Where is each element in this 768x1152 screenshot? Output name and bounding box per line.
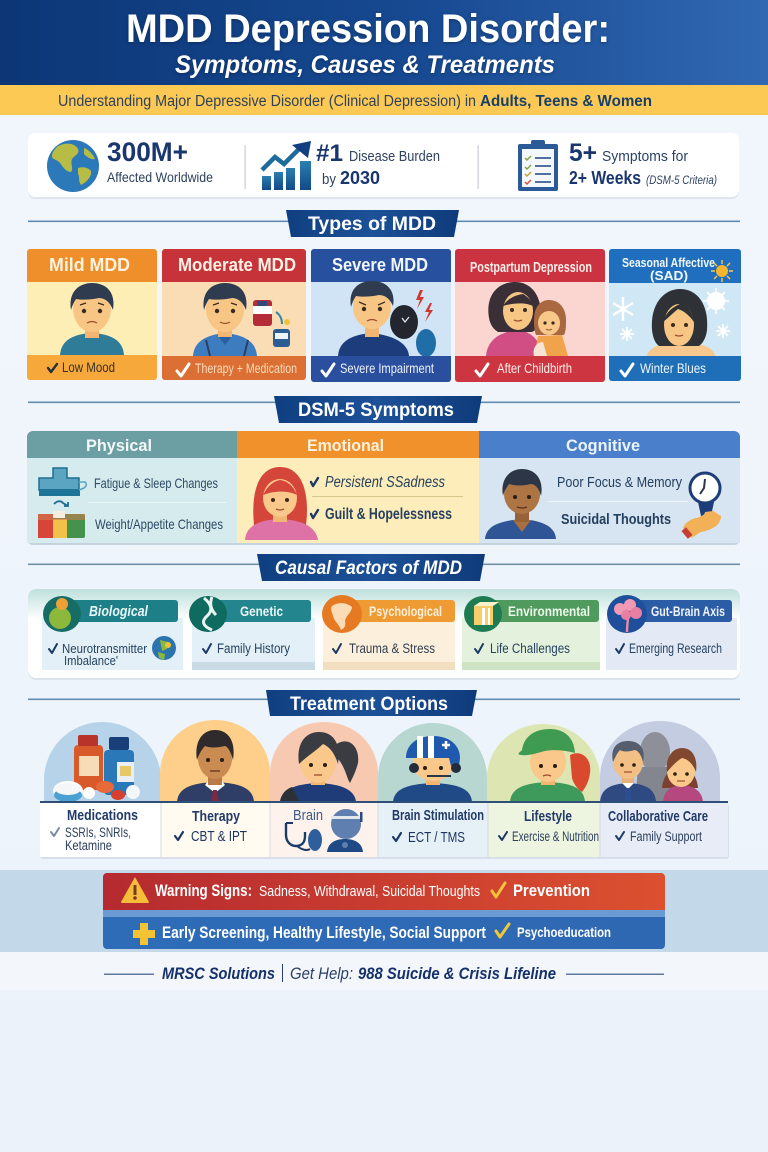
section heading: DSM-5 Symptoms: DSM-5 Symptoms: [298, 400, 454, 421]
icon: medication packs: [253, 300, 290, 347]
panel: Mild MDD: Mild MDD: [49, 255, 130, 275]
panel: Severe MDD: Severe MDD: [332, 255, 428, 275]
factor: Psychological: Psychological: [369, 603, 442, 619]
icon: bed and mug: [39, 468, 86, 506]
icon: plus cross: [133, 923, 155, 945]
section heading: DSM-5 Symptoms: [28, 396, 740, 423]
stat: DSM-5 criteria: 2+ Weeks: [569, 168, 641, 188]
column: Emotional: Persistent SSadness: [325, 474, 445, 491]
warning bar: Prevention: [513, 881, 590, 900]
cell: Brain Stimulation: Brain Stimulation: [392, 808, 484, 824]
panel: Seasonal Affective (SAD): (SAD): [650, 268, 688, 283]
arch: therapy: [160, 720, 270, 802]
cell: Therapy: CBT & IPT: [191, 828, 247, 845]
icon: woman with ponytail: [280, 732, 358, 802]
panel: Postpartum Depression: After Childbirth: [497, 360, 572, 376]
panel: DSM-5 symptoms: [27, 431, 740, 545]
header banner: [0, 0, 768, 85]
cell: Brain Stimulation: ECT / TMS: [408, 829, 465, 846]
icon: pill bottles: [53, 735, 140, 802]
cell: Medications: Ketamine: [65, 838, 112, 853]
factor: Biological: Biological: [89, 603, 149, 620]
section heading: Causal Factors of MDD: Causal Factors of MDD: [275, 558, 462, 579]
panel: Seasonal Affective (SAD): Winter Blues: [640, 360, 706, 376]
cell: Collaborative Care: Family Support: [630, 829, 702, 844]
factor: Gut-Brain Axis: [606, 595, 737, 670]
column: Physical: Physical: [86, 436, 152, 455]
warning bar: [103, 873, 665, 910]
icon: small globe: [152, 636, 176, 660]
factor: Genetic: [189, 596, 315, 670]
icon: neuron circle: [43, 596, 81, 632]
icon: rising bar chart: [262, 141, 311, 190]
cell: Collaborative Care: Collaborative Care: [608, 808, 708, 825]
column: Emotional: [237, 431, 479, 543]
subtitle: Symptoms, Causes & Treatments: [175, 51, 555, 79]
cell: Lifestyle: [499, 808, 599, 844]
factor: Environmental: Environmental: [508, 603, 590, 619]
cell: Lifestyle: Exercise & Nutrition: [512, 829, 599, 844]
column: Emotional: Emotional: [307, 436, 384, 455]
yellow tagline band: Adults, Teens & Women: [480, 93, 652, 110]
stat: disease burden: by: [322, 172, 337, 188]
arch: brain stimulation: [378, 723, 487, 802]
factor: Psychological: Trauma & Stress: [349, 641, 435, 656]
icon: sun small: [711, 260, 733, 282]
icon: person with stimulation helmet: [393, 736, 472, 802]
factor: Environmental: [462, 596, 600, 670]
panel: Moderate MDD: Moderate MDD: [178, 255, 296, 275]
icon: patient with head scanner: [327, 809, 363, 852]
icon: person with green cap: [510, 729, 590, 802]
stat: 300M+: Affected Worldwide: [107, 169, 213, 185]
factor: Gut-Brain Axis: Gut-Brain Axis: [651, 603, 725, 619]
icon: warning triangle: [121, 877, 149, 903]
column: Cognitive: [479, 431, 740, 543]
factor: Genetic: Genetic: [240, 603, 283, 619]
cell: Brain Stimulation: [392, 808, 484, 846]
cell: Medications: Medications: [67, 807, 138, 824]
panel: Mild MDD: Low Mood: [62, 359, 115, 375]
cell: Therapy: Therapy: [192, 808, 241, 825]
stat: 300M+: 300M+: [107, 137, 188, 167]
column: Emotional: Guilt & Hopelessness: [325, 506, 452, 523]
cell: Therapy: [175, 808, 247, 845]
footer: [0, 952, 768, 990]
factor: Biological: [42, 596, 183, 670]
stat: DSM-5 criteria: 5+: [569, 139, 597, 167]
icon: distressed man: [338, 281, 409, 356]
factor: Psychological: [322, 595, 455, 670]
icon: globe: [47, 140, 99, 192]
column: Physical: [27, 431, 237, 543]
column: Physical: Weight/Appetite Changes: [95, 516, 223, 532]
footer: Get Help:: [290, 964, 353, 983]
yellow tagline band: [0, 85, 768, 115]
icon: DNA circle: [189, 596, 227, 632]
warning bar: Warning Signs:: [155, 881, 252, 900]
stat: DSM-5 criteria: [569, 139, 717, 188]
icon: mother: [486, 282, 542, 356]
yellow tagline band: Understanding Major Depressive Disorder (Clinical Depression) in: [58, 93, 476, 110]
footer: MRSC Solutions: [162, 964, 275, 983]
icon: snowflakes and pale sun: [613, 288, 730, 341]
cell: Medications: [51, 807, 138, 853]
title: MDD Depression Disorder:: [126, 7, 610, 51]
section heading: Treatment Options: [28, 690, 740, 716]
stat: DSM-5 criteria: (DSM-5 Criteria): [646, 173, 717, 187]
section heading: Treatment Options: Treatment Options: [290, 694, 448, 715]
panel: Severe MDD: [311, 249, 451, 382]
stat: 300M+: [107, 137, 213, 185]
cell: Brain: Brain: [293, 808, 323, 824]
stat: DSM-5 criteria: Symptoms for: [602, 148, 688, 165]
panel: causal factors: [28, 589, 740, 680]
stats card: [28, 133, 739, 199]
icon: food box: [38, 511, 85, 538]
panel: Moderate MDD: [162, 249, 306, 380]
icon: head silhouette circle: [322, 595, 362, 633]
panel: Seasonal Affective (SAD): Seasonal Affective: [622, 255, 715, 270]
panel: Postpartum Depression: Postpartum Depression: [470, 259, 592, 276]
panel: Seasonal Affective (SAD): [609, 249, 741, 381]
prevention bar: [103, 917, 665, 949]
icon: brain tree circle: [607, 595, 647, 633]
stat: disease burden: Disease Burden: [349, 149, 440, 165]
icon: man with brown skin: [485, 469, 556, 539]
factor: Biological: Neurotransmitter: [62, 641, 148, 656]
prevention bar: Early Screening, Healthy Lifestyle, Social Support: [162, 923, 486, 942]
column: Cognitive: Poor Focus & Memory: [557, 474, 682, 491]
factor: Genetic: Family History: [217, 641, 290, 656]
cell: Brain: [286, 808, 363, 852]
footer: 988 Suicide & Crisis Lifeline: [358, 964, 556, 983]
panel: Mild MDD: [27, 249, 157, 380]
factor: Environmental: Life Challenges: [490, 641, 570, 656]
warning bar: Sadness, Withdrawal, Suicidal Thoughts: [259, 884, 480, 900]
icon: man with apron: [193, 283, 257, 356]
section heading: Types of MDD: [28, 210, 740, 237]
panel: treatment options: [40, 720, 729, 859]
icon: care team of three people: [600, 732, 703, 802]
arch: lifestyle: [487, 724, 600, 802]
cell: Collaborative Care: [608, 808, 708, 844]
icon: stethoscope: [286, 823, 322, 851]
cell: Medications: SSRIs, SNRIs,: [65, 825, 131, 840]
section heading: Types of MDD: Types of MDD: [308, 214, 436, 235]
icon: child with teddy: [534, 300, 568, 356]
warning and prevention band: [0, 870, 768, 952]
arch: collaborative care: [600, 721, 720, 802]
stat: disease burden: #1: [316, 140, 343, 167]
panel: Severe MDD: Severe Impairment: [340, 360, 434, 376]
arch: medications: [44, 722, 161, 802]
cell: Lifestyle: Lifestyle: [524, 808, 572, 825]
section heading: Causal Factors of MDD: [28, 554, 740, 581]
icon: red-haired woman: [245, 467, 318, 540]
icon: therapist in suit: [177, 730, 254, 802]
treatment table: [40, 801, 729, 859]
factor: Biological: Imbalance': [64, 653, 118, 668]
stat: disease burden: 2030: [340, 168, 380, 188]
panel: Postpartum Depression: [455, 249, 605, 382]
icon: clipboard checklist: [518, 140, 558, 191]
icon: storm cloud and lightning: [390, 290, 436, 357]
stat: disease burden: [316, 140, 440, 188]
icon: clock and hand: [681, 473, 721, 539]
column: Physical: Fatigue & Sleep Changes: [94, 475, 218, 491]
icon: building circle: [464, 596, 502, 632]
prevention bar: Psychoeducation: [517, 924, 611, 940]
icon: woman with long hair: [647, 289, 715, 356]
arch: brain: [270, 722, 378, 802]
column: Cognitive: Suicidal Thoughts: [561, 511, 671, 528]
panel: Moderate MDD: Therapy + Medication: [195, 360, 297, 376]
factor: Gut-Brain Axis: Emerging Research: [629, 641, 722, 656]
column: Cognitive: Cognitive: [566, 436, 640, 455]
icon: sad young man: [60, 283, 124, 355]
